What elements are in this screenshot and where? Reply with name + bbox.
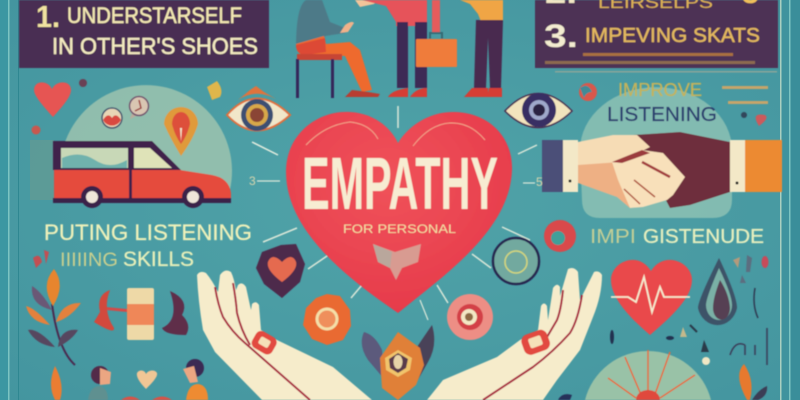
icon: orange flower <box>303 294 351 345</box>
small heart between <box>137 370 157 389</box>
heart title: EMPATHY <box>302 142 498 225</box>
icon: clock pin <box>130 96 149 119</box>
icon: scattered marks right <box>610 255 768 365</box>
banner line one: UNDERSTARSELF <box>67 3 242 28</box>
icon: heart with pulse <box>611 260 692 335</box>
label: improve: IMPROVE <box>618 80 702 100</box>
icon: small swirl near listening <box>579 83 597 101</box>
icon: gold charm <box>207 81 221 100</box>
illustration: left caring hand <box>197 271 372 400</box>
line two fade: IIIIING <box>60 250 118 271</box>
chart marks: accent strokes around heart: 3 <box>249 174 256 188</box>
panel: top right banner <box>535 0 778 68</box>
icon: water drop <box>698 258 737 325</box>
ring on hand <box>249 329 279 357</box>
word: GISTENUDE <box>643 226 764 248</box>
icon: pale bird <box>373 244 421 280</box>
icon: round badge <box>493 238 539 284</box>
banner line three: IMPEVING SKATS <box>585 25 760 47</box>
panel: top left banner <box>19 0 269 68</box>
text: improve listening <box>580 80 732 218</box>
main heart <box>286 112 512 313</box>
standing person in yellow <box>460 0 503 97</box>
car body <box>53 141 231 208</box>
illustration: two people talking <box>88 359 208 400</box>
chart marks: accent strokes around heart: 5 <box>536 175 543 189</box>
heading: gratitude <box>590 226 764 248</box>
icon: bottom center-right dark shape <box>558 394 572 400</box>
icon: scroll with listeners <box>94 288 188 340</box>
icon: lower leaf <box>51 366 62 400</box>
icon: round badge left <box>102 108 122 128</box>
standing person in red <box>355 0 440 97</box>
icon: small heart <box>34 82 71 117</box>
illustration: lower center bird medallion <box>362 325 434 400</box>
icon: leaf branch <box>26 269 81 365</box>
man <box>183 359 208 400</box>
banner line two: IN OTHER'S SHOES <box>52 33 258 59</box>
woman <box>88 366 111 400</box>
illustration: handshake <box>542 132 782 208</box>
icon: left eye <box>227 86 290 131</box>
numeral 1: 1. <box>36 0 60 34</box>
icon: flame medallion <box>164 107 198 156</box>
seated person <box>296 0 380 98</box>
chart marks: accent strokes around heart <box>249 106 543 320</box>
illustration: red car in circle <box>53 85 232 208</box>
heart subtitle: FOR PERSONAL <box>343 224 457 236</box>
icon: pink flower <box>447 294 493 340</box>
illustration: right caring hand <box>427 268 602 400</box>
faded prefix: IMPI <box>590 226 636 248</box>
icon: red swirl disk <box>544 220 576 252</box>
heading: putting listening skills <box>44 220 252 271</box>
illustration: sunburst <box>585 350 711 400</box>
pulse line <box>611 277 690 312</box>
illustration: three people meeting <box>296 0 503 98</box>
label: listening: LISTENING <box>607 104 717 126</box>
line one: PUTING LISTENING <box>44 220 252 245</box>
line two: SKILLS <box>123 248 194 271</box>
ring on hand <box>519 328 552 357</box>
icon: leaf bottom right <box>739 364 767 400</box>
icon: dark flower heart <box>256 244 305 298</box>
orange briefcase <box>416 33 457 67</box>
numeral 3: 3. <box>544 18 578 54</box>
icon: right eye <box>505 93 572 128</box>
